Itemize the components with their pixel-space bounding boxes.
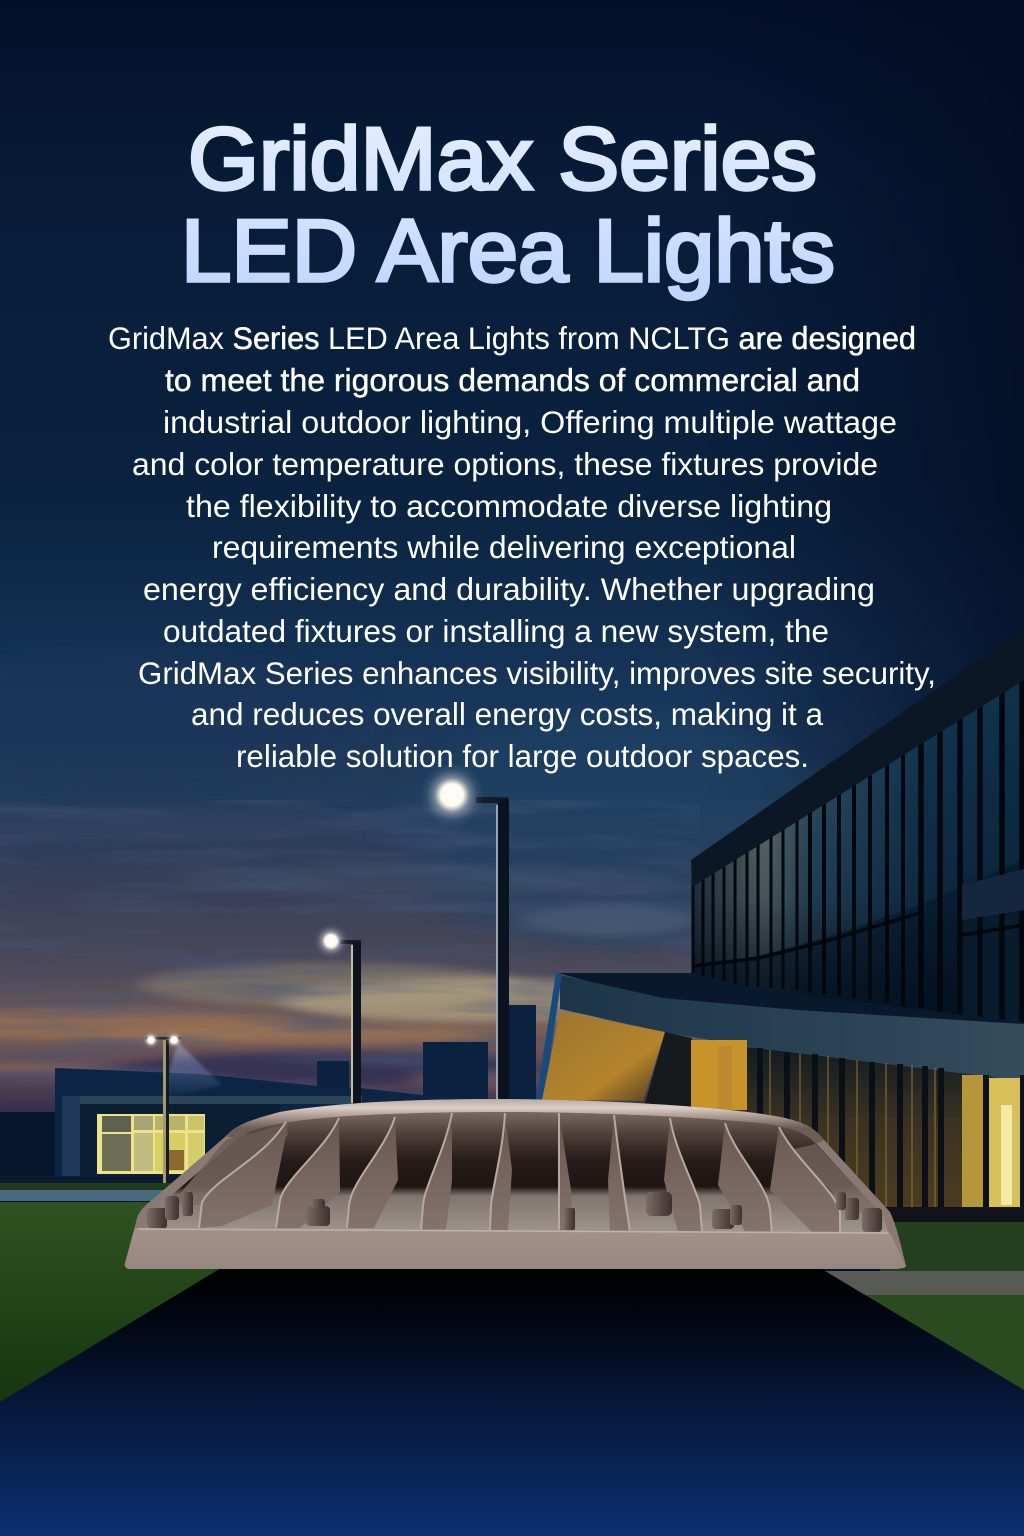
fascia bbox=[560, 975, 1024, 1081]
street light: far pole bbox=[142, 1031, 222, 1188]
golden wall bbox=[542, 1011, 665, 1101]
intro paragraph: GridMax Series LED Area Lights from NCLTG are designed bbox=[108, 320, 916, 356]
product: GridMax LED area light housing bbox=[125, 1099, 906, 1269]
title: GridMax Series bbox=[188, 109, 817, 208]
intro paragraph: to meet the rigorous demands of commercial and bbox=[165, 362, 860, 398]
street light: middle pole bbox=[314, 924, 361, 1104]
cooling fins bbox=[170, 1113, 884, 1235]
low roof bbox=[558, 973, 1024, 1030]
distant building silhouettes bbox=[0, 1005, 536, 1187]
intro paragraph: outdated fixtures or installing a new system, the bbox=[163, 613, 829, 649]
blue edge bbox=[536, 973, 562, 1100]
front lip bbox=[125, 1228, 906, 1269]
background: night sky bbox=[0, 0, 1024, 1120]
modern office building bbox=[536, 628, 1024, 1223]
intro paragraph: energy efficiency and durability. Whether upgrading bbox=[143, 571, 875, 607]
intro paragraph: industrial outdoor lighting, Offering multiple wattage bbox=[163, 404, 897, 440]
housing body bbox=[125, 1099, 906, 1269]
intro paragraph bbox=[108, 320, 936, 774]
intro paragraph: the flexibility to accommodate diverse lighting bbox=[186, 488, 832, 524]
street light: near pole bbox=[420, 763, 509, 1099]
upper glazing bbox=[692, 628, 1024, 1030]
title bbox=[181, 109, 835, 300]
intro paragraph: reliable solution for large outdoor spaces. bbox=[236, 738, 809, 774]
intro paragraph: requirements while delivering exceptional bbox=[212, 529, 796, 565]
mounting pegs bbox=[147, 1192, 882, 1232]
lawn and walkway bbox=[0, 1183, 1024, 1402]
low building with lit window bbox=[0, 1068, 500, 1186]
intro paragraph: and color temperature options, these fixtures provide bbox=[132, 446, 878, 482]
top rim bbox=[226, 1099, 824, 1144]
dark foreground road bbox=[0, 1265, 1024, 1536]
lit window panes bbox=[97, 1114, 205, 1174]
intro paragraph: GridMax Series enhances visibility, improves site security, bbox=[138, 655, 936, 691]
lower glazing bbox=[643, 1032, 1024, 1207]
sunset clouds bbox=[0, 800, 710, 1100]
title: LED Area Lights bbox=[181, 201, 835, 300]
roof band bbox=[691, 628, 1024, 887]
intro paragraph: and reduces overall energy costs, making it a bbox=[191, 696, 823, 732]
fin highlights bbox=[199, 1113, 840, 1235]
interior cavity bbox=[146, 1112, 888, 1232]
